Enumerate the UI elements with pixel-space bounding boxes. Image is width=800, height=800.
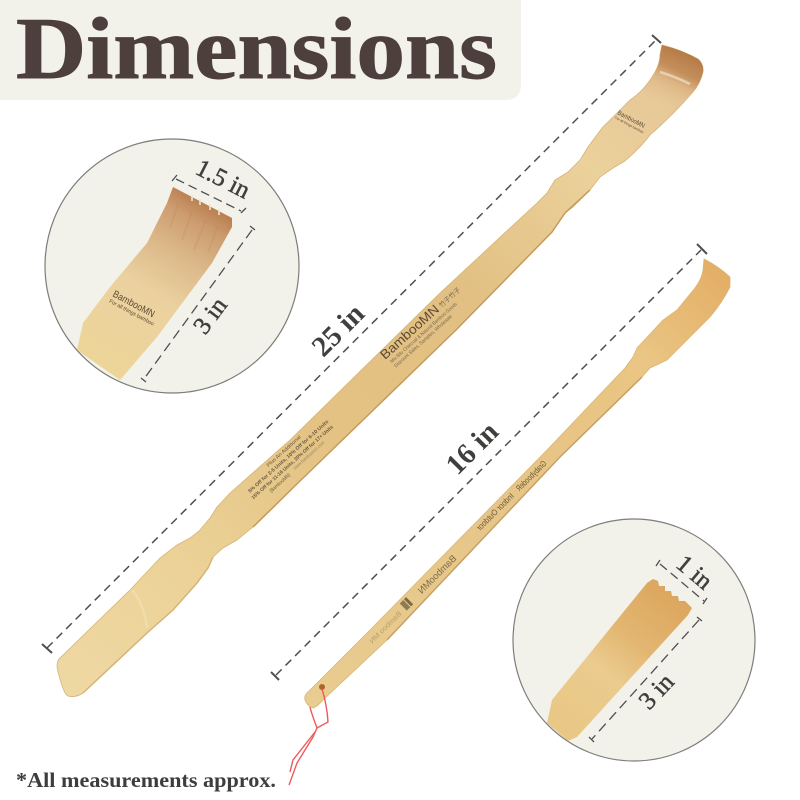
large back scratcher	[57, 45, 703, 697]
stamp: discount text: 5% Off for 2-5 Units, 10% Off for 6-10 Units	[247, 419, 330, 494]
head logo: For all things bamboo	[108, 299, 155, 327]
stamp: mirrored logo	[366, 553, 459, 646]
footnote: *All measurements approx.	[16, 768, 276, 792]
stamp: mirrored logo: BambooMN	[416, 553, 459, 597]
label: 1 in: 1 in	[671, 550, 718, 596]
stamp: discount text: 15% Off for 11-16 Units, 20% Off for 17+ Units	[251, 424, 335, 501]
dimension: 1.5 in line	[172, 175, 246, 213]
red string	[289, 689, 328, 785]
dimension: 3 in line	[141, 226, 255, 382]
stamp: discount text: www.bamboomn.com	[292, 440, 326, 471]
stamp: brand text: 竹子竹子	[437, 285, 463, 309]
stamp: brand text	[377, 282, 472, 371]
stamp: discount text: (BambooMN)	[269, 472, 292, 494]
label: 1.5 in: 1.5 in	[191, 154, 255, 205]
stamp: mirrored brand	[474, 458, 548, 533]
small back scratcher	[289, 259, 730, 785]
stamp: mirrored logo: Bamboo MN	[369, 611, 403, 645]
head close-up	[547, 579, 692, 741]
stamp: brand text: Discount Sales, Samples, Wholesale	[393, 314, 454, 369]
circle panel: small head detail	[513, 519, 755, 761]
dimension line: 16 in	[271, 244, 707, 680]
dimension line: 25 in	[42, 35, 661, 653]
stamp: mirrored brand: GrabyboodeR	[514, 458, 548, 493]
string hole	[319, 684, 325, 690]
label: 25 in: 25 in	[306, 298, 371, 363]
stamp: head logo: BambooMN	[616, 110, 646, 130]
stamp: brand text: BambooMN	[377, 302, 442, 362]
label: 3 in: 3 in	[188, 292, 233, 339]
dimension: 3 in line	[589, 617, 702, 742]
stamp: discount text: Plus An Additional	[266, 435, 302, 469]
label: 16 in: 16 in	[440, 416, 505, 481]
head close-up	[77, 187, 232, 380]
head logo: BambooMN	[111, 289, 156, 320]
title panel	[0, 0, 521, 100]
stamp: head logo: For all things bamboo	[614, 116, 644, 134]
circle panel: large head detail	[45, 139, 299, 393]
label: 3 in: 3 in	[634, 668, 680, 715]
stamp: brand text: Mix Bilu Charcoal & Natural Bamboo Goods	[389, 301, 459, 365]
title: Dimensions	[16, 1, 497, 98]
dimension: 1 in line	[656, 560, 707, 604]
stamp: mirrored brand: Indoor Outdoor	[474, 491, 516, 533]
